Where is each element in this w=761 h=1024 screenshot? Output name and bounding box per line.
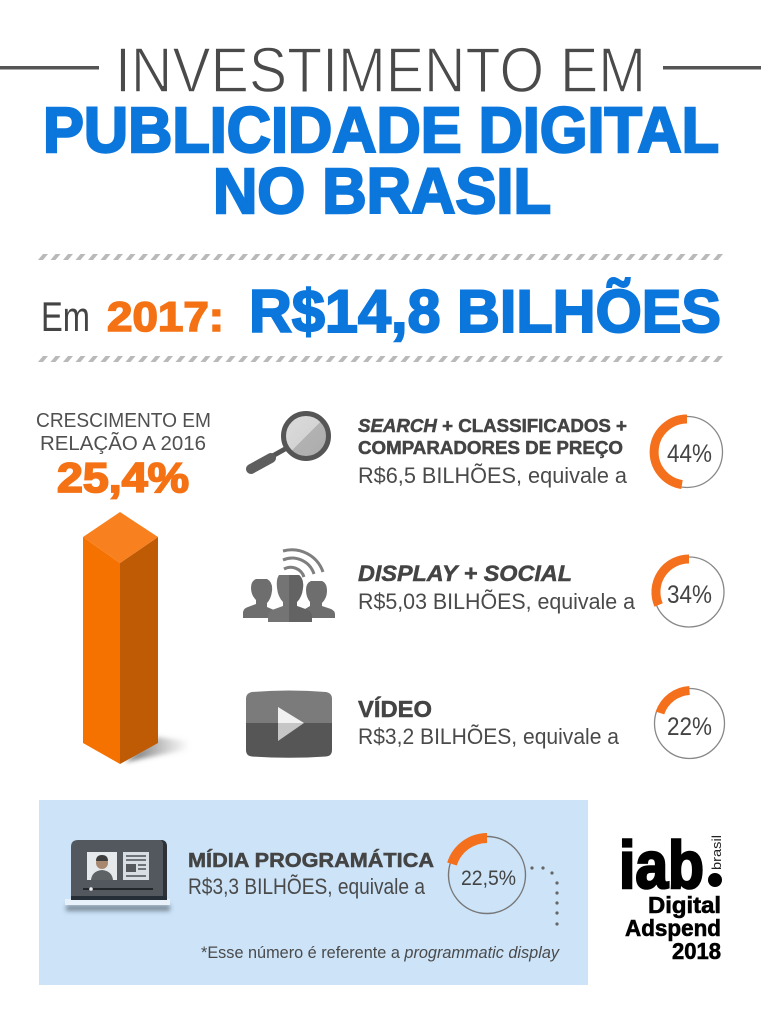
growth label: CRESCIMENTO EM	[36, 410, 211, 432]
headline total: Em	[41, 293, 90, 340]
donut: 22%: 22%	[667, 713, 712, 741]
panel: programmatic media	[39, 800, 588, 985]
donut: 44%: 44%	[667, 440, 712, 468]
display text: R$5,03 BILHÕES, equivale a	[358, 589, 636, 614]
donut: 34%: 34%	[667, 581, 712, 609]
donut: 44%	[652, 416, 722, 488]
logo: iab brasil Digital Adspend 2018: iab	[619, 828, 704, 903]
headline total: R$14,8 BILHÕES	[249, 278, 721, 345]
donut: 34%	[654, 557, 724, 627]
donut: 22,5%	[448, 836, 526, 914]
video text: R$3,2 BILHÕES, equivale a	[358, 724, 620, 749]
icon: magnifying glass	[251, 414, 328, 469]
search text: SEARCH + CLASSIFICADOS +	[358, 416, 627, 436]
growth label: RELAÇÃO A 2016	[40, 431, 206, 455]
search text	[358, 416, 628, 488]
3D orange bar	[83, 512, 190, 764]
dotted connector	[530, 866, 559, 926]
search text: R$6,5 BILHÕES, equivale a	[358, 463, 628, 488]
display text	[358, 561, 636, 614]
programmatic text: R$3,3 BILHÕES, equivale a	[188, 874, 426, 899]
title: PUBLICIDADE DIGITAL	[43, 94, 719, 166]
icon: video player	[246, 690, 332, 758]
display text: DISPLAY + SOCIAL	[358, 561, 572, 586]
logo: iab brasil Digital Adspend 2018: Digital	[648, 892, 721, 918]
video text	[358, 695, 620, 749]
title	[0, 34, 761, 227]
footnote: *Esse número é referente a programmatic display	[201, 943, 560, 962]
donut: 22,5%: 22,5%	[461, 867, 516, 890]
donut: 22%	[654, 688, 724, 758]
headline total	[38, 254, 724, 362]
title: INVESTIMENTO EM	[115, 34, 646, 106]
icon: people with signal	[243, 550, 335, 622]
title: NO BRASIL	[213, 155, 551, 227]
logo: iab brasil Digital Adspend 2018: brasil	[709, 835, 724, 870]
logo: iab brasil Digital Adspend 2018: 2018	[672, 938, 721, 964]
growth label: 25,4%	[57, 454, 189, 501]
headline total: 2017:	[107, 293, 224, 340]
programmatic text	[188, 849, 434, 899]
logo: iab brasil Digital Adspend 2018: Adspend	[625, 915, 721, 941]
programmatic text: MÍDIA PROGRAMÁTICA	[188, 849, 434, 872]
logo: iab brasil Digital Adspend 2018	[619, 828, 724, 964]
search text: COMPARADORES DE PREÇO	[358, 438, 623, 458]
icon: laptop	[65, 840, 170, 911]
video text: VÍDEO	[358, 695, 432, 722]
growth label	[36, 410, 211, 501]
